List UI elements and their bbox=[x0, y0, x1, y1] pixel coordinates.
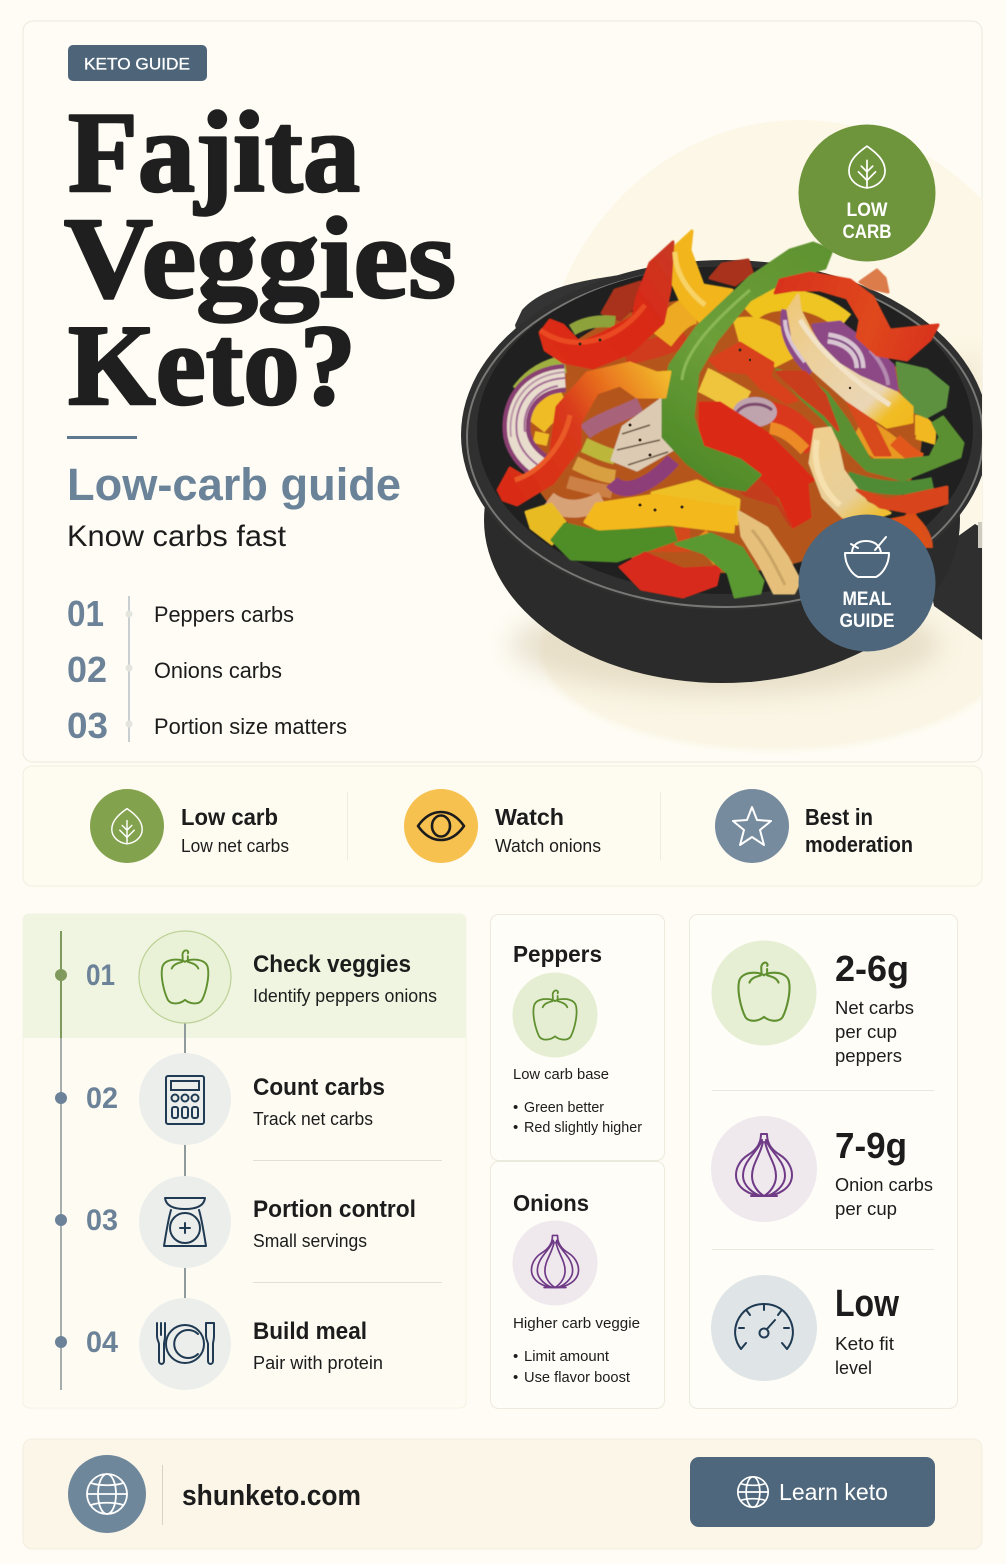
subtitle: Low-carb guide bbox=[67, 459, 401, 510]
panel: peppers card: Green better bbox=[524, 1099, 604, 1116]
stat: onion carbs bbox=[711, 1116, 933, 1222]
panel: steps timeline bbox=[23, 914, 466, 1408]
panel: footer bbox=[23, 1439, 982, 1549]
panel: peppers card bbox=[490, 914, 664, 1160]
panel: peppers card: Low carb base bbox=[513, 1066, 609, 1083]
step 3: portion control bbox=[86, 1176, 416, 1268]
step 3: portion control: Portion control bbox=[253, 1196, 416, 1223]
feature: watch bbox=[404, 789, 601, 863]
button: learn keto bbox=[690, 1457, 935, 1527]
pan body bbox=[484, 507, 960, 683]
green right bbox=[897, 363, 948, 417]
hero image: skillet of fajita veggies bbox=[461, 120, 1006, 750]
stat: peppers net carbs: peppers bbox=[835, 1045, 902, 1066]
badge: meal guide: GUIDE bbox=[840, 611, 894, 632]
panel: peppers card: • bbox=[513, 1099, 518, 1116]
contents list: 01 bbox=[67, 593, 104, 634]
feature: best in moderation: moderation bbox=[805, 832, 913, 857]
bottom row bbox=[652, 481, 739, 524]
warm base layer bbox=[522, 297, 922, 573]
badge: low carb: CARB bbox=[842, 222, 892, 243]
step 3: portion control: 03 bbox=[86, 1204, 118, 1237]
badge: meal guide bbox=[798, 514, 936, 652]
step 1: check veggies: Identify peppers onions bbox=[253, 986, 437, 1006]
step 2: count carbs bbox=[86, 1053, 385, 1145]
panel: carb stats bbox=[690, 914, 958, 1408]
step 2: count carbs: Track net carbs bbox=[253, 1109, 373, 1129]
panel: peppers card: Red slightly higher bbox=[524, 1119, 642, 1136]
contents list: Portion size matters bbox=[154, 714, 347, 739]
title bbox=[64, 89, 456, 430]
stat: peppers net carbs bbox=[712, 940, 914, 1066]
feature: low carb: Low net carbs bbox=[181, 836, 289, 856]
button: learn keto: Learn keto bbox=[779, 1479, 888, 1505]
main strips bbox=[668, 231, 732, 322]
stat: peppers net carbs: Net carbs bbox=[835, 997, 914, 1018]
panel: peppers card: Peppers bbox=[513, 941, 602, 967]
panel: onions card: Use flavor boost bbox=[524, 1369, 631, 1386]
title: Veggies bbox=[64, 195, 456, 323]
step 1: check veggies: Check veggies bbox=[253, 951, 411, 978]
feature: best in moderation bbox=[715, 789, 913, 863]
step 3: portion control: Small servings bbox=[253, 1231, 367, 1251]
step 4: build meal: 04 bbox=[86, 1326, 118, 1359]
step 2: count carbs: 02 bbox=[86, 1082, 118, 1115]
contents list: 02 bbox=[67, 649, 107, 690]
panel: onions card bbox=[490, 1162, 664, 1408]
icon: globe bbox=[68, 1455, 146, 1533]
panel: feature strip bbox=[23, 766, 982, 886]
badge: low carb: LOW bbox=[846, 200, 888, 221]
step 4: build meal: Build meal bbox=[253, 1318, 367, 1345]
panel: onions card: • bbox=[513, 1348, 518, 1365]
website: shunketo.com bbox=[182, 1480, 361, 1512]
tagline: Know carbs fast bbox=[67, 520, 287, 553]
step 4: build meal bbox=[86, 1298, 383, 1390]
badge: meal guide: MEAL bbox=[842, 589, 892, 610]
step 2: count carbs: Count carbs bbox=[253, 1074, 385, 1101]
contents list: Onions carbs bbox=[154, 658, 282, 683]
stat: peppers net carbs: per cup bbox=[835, 1021, 897, 1042]
badge: keto guide bbox=[68, 45, 207, 81]
panel: onions card: Higher carb veggie bbox=[513, 1315, 640, 1332]
badge: low carb bbox=[798, 124, 936, 262]
feature: watch: Watch onions bbox=[495, 836, 601, 856]
stat: keto fit level bbox=[711, 1275, 899, 1381]
contents list: 03 bbox=[67, 705, 108, 746]
feature: low carb bbox=[90, 789, 289, 863]
badge: keto guide: KETO GUIDE bbox=[84, 54, 190, 74]
panel: onions card: • bbox=[513, 1369, 518, 1386]
step 1: check veggies: 01 bbox=[86, 959, 115, 992]
vegetables bbox=[498, 231, 963, 597]
panel: onions card: Limit amount bbox=[524, 1348, 610, 1365]
feature: watch: Watch bbox=[495, 804, 564, 830]
stat: keto fit level: level bbox=[835, 1357, 872, 1378]
onions bbox=[813, 322, 897, 390]
step 1: check veggies bbox=[86, 931, 437, 1023]
panel: onions card: Onions bbox=[513, 1190, 589, 1216]
title: Keto? bbox=[68, 302, 356, 430]
title: Fajita bbox=[68, 89, 360, 217]
stat: keto fit level: Keto fit bbox=[835, 1333, 894, 1354]
stat: peppers net carbs: 2-6g bbox=[835, 948, 909, 989]
contents list bbox=[67, 593, 347, 746]
step 4: build meal: Pair with protein bbox=[253, 1353, 383, 1373]
panel: hero bbox=[23, 21, 1006, 762]
back peppers bbox=[602, 282, 640, 320]
stat: keto fit level: Low bbox=[835, 1283, 899, 1325]
seasoning flecks bbox=[578, 338, 851, 512]
feature: low carb: Low carb bbox=[181, 804, 278, 830]
pan handle bbox=[933, 524, 982, 640]
contents list: Peppers carbs bbox=[154, 602, 294, 627]
stat: onion carbs: 7-9g bbox=[835, 1125, 907, 1166]
stat: onion carbs: Onion carbs bbox=[835, 1174, 933, 1195]
feature: best in moderation: Best in bbox=[805, 804, 873, 830]
stat: onion carbs: per cup bbox=[835, 1198, 897, 1219]
panel: peppers card: • bbox=[513, 1119, 518, 1136]
